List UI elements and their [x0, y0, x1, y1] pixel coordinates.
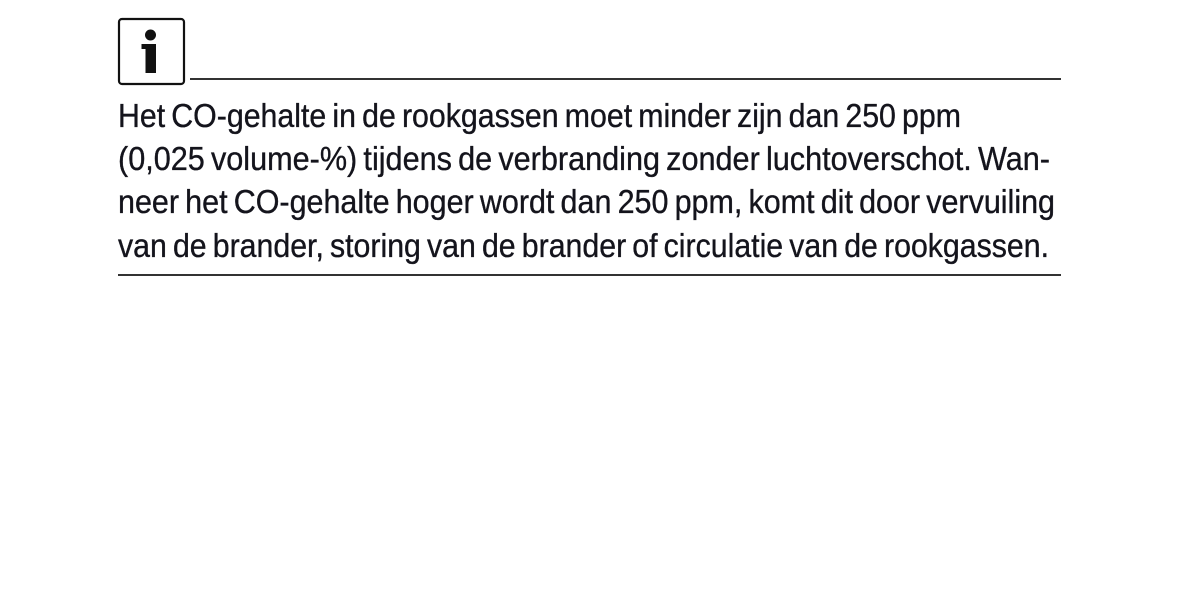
text block: CO warning: [118, 97, 1055, 264]
text block: CO warning: van de brander, storing van de brander of circulatie van de rookgassen.: [118, 227, 1049, 264]
top rule: [190, 78, 1061, 80]
bottom rule: [118, 274, 1061, 276]
text block: CO warning: neer het CO-gehalte hoger wordt dan 250 ppm, komt dit door vervuiling: [118, 183, 1055, 220]
text block: CO warning: Het CO-gehalte in de rookgassen moet minder zijn dan 250 ppm: [118, 97, 961, 134]
icon: information box: [119, 19, 184, 84]
text block: CO warning: (0,025 volume-%) tijdens de verbranding zonder luchtoverschot. Wan-: [118, 140, 1050, 177]
